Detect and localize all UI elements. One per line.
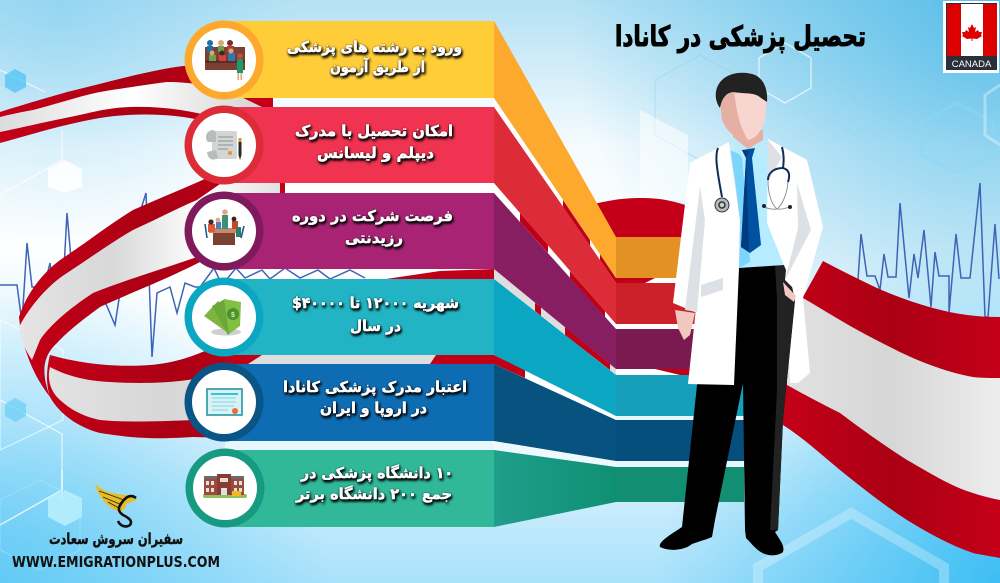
text: step labels: ۱۰ دانشگاه پزشکی در [300,464,453,483]
ribbon: top left band [0,66,275,143]
step 3: purple bar [184,192,706,369]
doctor figure [660,73,823,555]
text: step labels: فرصت شرکت در دوره [292,207,453,225]
icon: certificate [207,389,242,415]
coat back tail [785,280,810,383]
text: step labels: جمع ۲۰۰ دانشگاه برتر [295,485,452,503]
flag: Canada: CANADA [952,59,992,70]
step 4: teal bar [184,278,744,416]
neck and face [716,73,767,152]
text: step labels: دیپلم و لیسانس [317,144,434,163]
step 5: blue bar [184,362,744,461]
tie [741,148,761,253]
text: step labels [283,38,467,503]
text: step labels: امکان تحصیل با مدرک [295,122,453,140]
icon: university building [203,474,247,498]
logo: WWW.EMIGRATIONPLUS.COM [12,553,220,571]
flag: Canada [943,1,999,73]
text: step labels: اعتبار مدرک پزشکی کانادا [283,378,467,397]
gaps between side panels [494,98,744,467]
logo [12,483,220,571]
gaps between bars [225,98,494,450]
ribbon: lower left band [47,347,300,440]
text: step labels: در اروپا و ایران [320,399,427,418]
text: step labels: از طریق آزمون [330,58,425,76]
white coat [673,139,823,385]
collar [729,136,768,158]
ribbon: right wave band [590,198,1000,558]
step 1: yellow bar [184,20,706,278]
icon: banknotes: $ [231,312,235,319]
ribbon: diagonal band [19,150,287,397]
icon: diploma scroll and pen [206,130,242,160]
text: step labels: در سال [350,317,401,335]
step 6: green bar [186,448,744,528]
ECG line left [0,193,365,357]
stethoscope [715,147,792,212]
step 2: red bar [184,106,706,324]
hands [675,282,796,340]
title: تحصیل پزشکی در کانادا [615,20,866,53]
shirt [729,148,784,268]
icon: lecture hall [205,40,245,80]
logo: سفیران سروش سعادت [49,530,183,548]
text: step labels: ورود به رشته های پزشکی [287,38,462,57]
trousers [660,264,795,555]
text: step labels: رزیدنتی [345,229,403,247]
icon: meeting [205,209,244,245]
text: step labels: شهریه ۱۲۰۰۰ تا ۴۰۰۰۰$ [292,294,459,312]
icon: gold wing bird [95,483,136,526]
ECG line right [858,183,999,317]
icon: maple leaf [962,24,982,41]
icon: banknotes [204,299,241,336]
